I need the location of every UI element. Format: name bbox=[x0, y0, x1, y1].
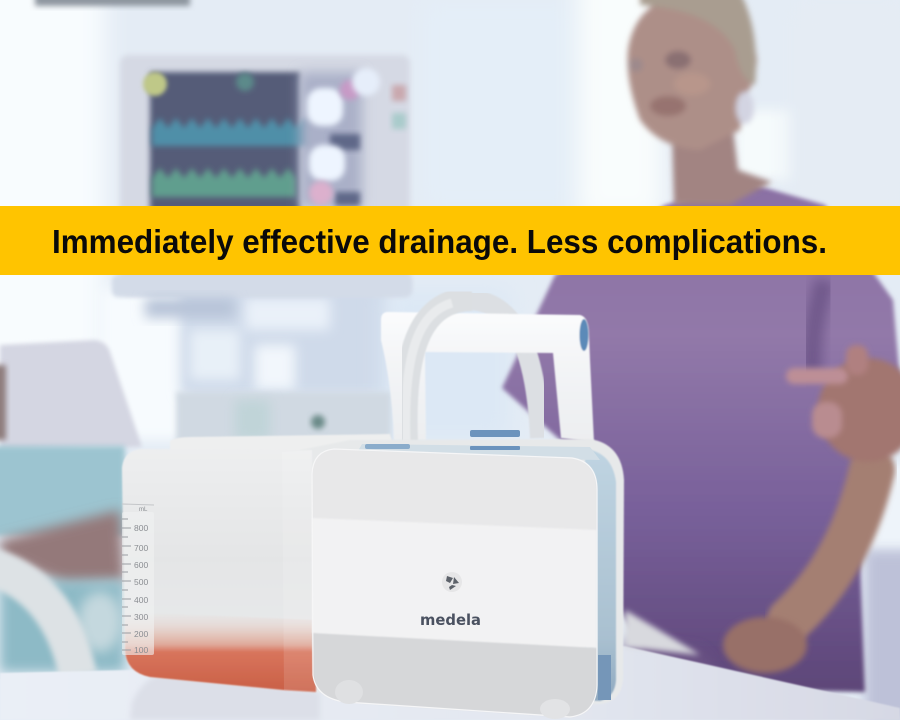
headline: Immediately effective drainage. Less complications. bbox=[52, 223, 827, 260]
nurse arm and hands bbox=[790, 470, 872, 620]
blurred patient monitor bbox=[112, 55, 412, 444]
canister scale: 100 bbox=[134, 645, 148, 655]
rear top of the canister bbox=[170, 434, 400, 470]
blood level bbox=[125, 612, 316, 692]
canister scale: 700 bbox=[134, 543, 148, 553]
feet bbox=[335, 680, 363, 704]
pump body rear shell bbox=[300, 439, 624, 704]
carry handle bbox=[381, 312, 594, 442]
canister scale: 400 bbox=[134, 595, 148, 605]
blurred patient in bed bbox=[0, 340, 142, 676]
top controls bbox=[355, 444, 600, 460]
tube behind the handle bbox=[468, 300, 540, 438]
drainage device bbox=[122, 299, 624, 719]
tube in front of the handle bbox=[406, 299, 472, 442]
pump side panel bbox=[585, 449, 616, 701]
canister body bbox=[122, 449, 316, 692]
medela logo icon bbox=[442, 572, 462, 592]
canister scale bbox=[122, 504, 154, 655]
canister scale: 600 bbox=[134, 560, 148, 570]
canister scale: 800 bbox=[134, 523, 148, 533]
blurred nurse in purple scrubs bbox=[502, 0, 900, 692]
canister scale: 500 bbox=[134, 577, 148, 587]
yellow headline banner bbox=[0, 206, 900, 275]
medela wordmark: medela bbox=[420, 611, 481, 629]
canister scale: 200 bbox=[134, 629, 148, 639]
nurse head and neck bbox=[628, 0, 772, 205]
white table top bbox=[0, 610, 900, 720]
canister scale: 300 bbox=[134, 612, 148, 622]
front panel bbox=[312, 449, 597, 717]
canister scale: mL bbox=[139, 507, 148, 513]
